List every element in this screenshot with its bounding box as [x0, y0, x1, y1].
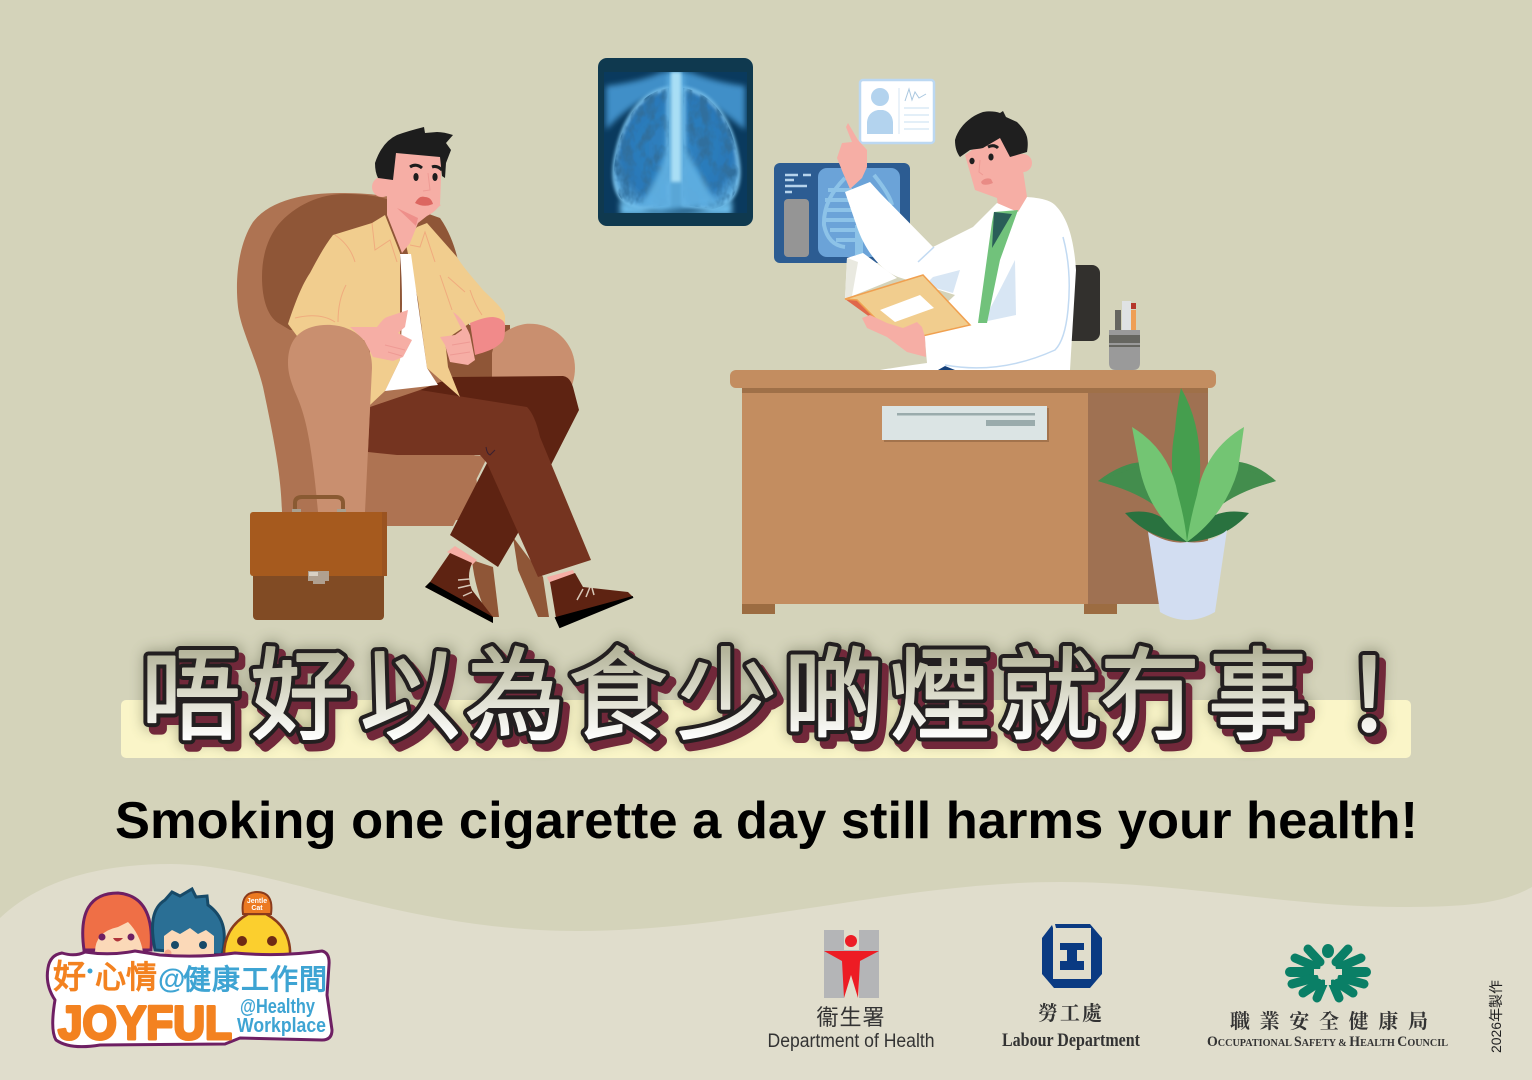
logo plate — [47, 951, 332, 1047]
lab coat — [845, 182, 1076, 370]
potted plant — [1098, 388, 1276, 620]
ear — [1014, 154, 1032, 172]
labour department logo: Labour Department — [1002, 1030, 1141, 1051]
logo chinese: 心情 — [95, 960, 157, 995]
oshc emblem — [1290, 949, 1366, 998]
chest x-ray poster — [774, 163, 910, 263]
knee crease — [486, 447, 495, 455]
logo healthy workplace text: Workplace — [237, 1015, 326, 1037]
girl character — [83, 893, 151, 952]
cat character — [224, 892, 290, 958]
oshc logo — [1207, 944, 1448, 1050]
front leg — [368, 390, 591, 577]
face and neck — [965, 130, 1027, 212]
ld emblem — [1042, 924, 1102, 988]
department of health logo — [768, 930, 934, 1052]
labour department logo — [1002, 924, 1141, 1051]
hand holding book — [862, 315, 926, 357]
department of health logo: 衞生署 — [816, 1005, 886, 1030]
boy character — [152, 889, 224, 965]
face — [387, 153, 442, 218]
briefcase — [250, 497, 387, 620]
neck — [387, 190, 441, 253]
open book — [845, 253, 970, 337]
coat pocket shade — [983, 260, 1016, 322]
shirt — [288, 215, 505, 405]
patient armchair — [237, 193, 575, 617]
lung x-ray panel — [598, 58, 753, 226]
shoes — [425, 546, 633, 627]
dh emblem — [824, 930, 879, 998]
eyes mouth — [969, 146, 998, 185]
title chinese: 唔好以為食少啲煙就冇事！ — [147, 648, 1425, 760]
desk — [730, 370, 1216, 614]
forearm — [470, 317, 505, 355]
patient profile card — [860, 80, 934, 143]
patient figure — [288, 127, 633, 627]
production year note: 2026年製作 — [1488, 980, 1504, 1053]
hair — [955, 111, 1028, 157]
title chinese: 唔好以為食少啲煙就冇事！ — [141, 641, 1419, 753]
hands — [350, 310, 475, 365]
joyful workplace logo — [47, 889, 332, 1049]
title banner — [121, 700, 1411, 758]
title chinese: 唔好以為食少啲煙就冇事！ — [141, 641, 1419, 753]
hair — [375, 127, 453, 180]
oshc logo: OCCUPATIONAL SAFETY & HEALTH COUNCIL — [1207, 1034, 1448, 1050]
logo joyful text: JOYFUL — [58, 996, 232, 1049]
logo chinese: 健康工作間 — [183, 964, 327, 995]
white t-shirt — [385, 254, 438, 391]
pen cup — [1109, 301, 1140, 370]
desk drawer — [882, 406, 1049, 442]
green shirt — [978, 210, 1018, 323]
department of health logo: Department of Health — [768, 1031, 934, 1052]
footer wave — [0, 864, 1532, 1080]
english subtitle: Smoking one cigarette a day still harms your health! — [115, 792, 1418, 850]
doctor figure — [837, 111, 1076, 370]
shirt folds — [295, 223, 482, 322]
navy trousers hint — [938, 366, 955, 370]
labour department logo: 勞工處 — [1038, 1002, 1104, 1025]
left armrest — [288, 325, 372, 512]
logo chinese — [53, 958, 327, 995]
cat character: Jentle — [247, 898, 267, 905]
title chinese: 唔好以為食少啲煙就冇事！ — [143, 642, 1421, 754]
doctor chair back — [1050, 265, 1100, 341]
logo healthy workplace text: @Healthy — [240, 996, 316, 1018]
logo healthy workplace text — [237, 996, 326, 1037]
ear — [372, 177, 392, 197]
logo chinese: @ — [158, 963, 185, 994]
logo chinese: 好 — [53, 958, 86, 995]
cat character: Cat — [251, 905, 263, 912]
back leg — [420, 376, 579, 567]
eyes brows nose mouth — [410, 165, 442, 206]
raised hand — [837, 123, 867, 189]
oshc logo: 職業安全健康局 — [1230, 1010, 1428, 1033]
